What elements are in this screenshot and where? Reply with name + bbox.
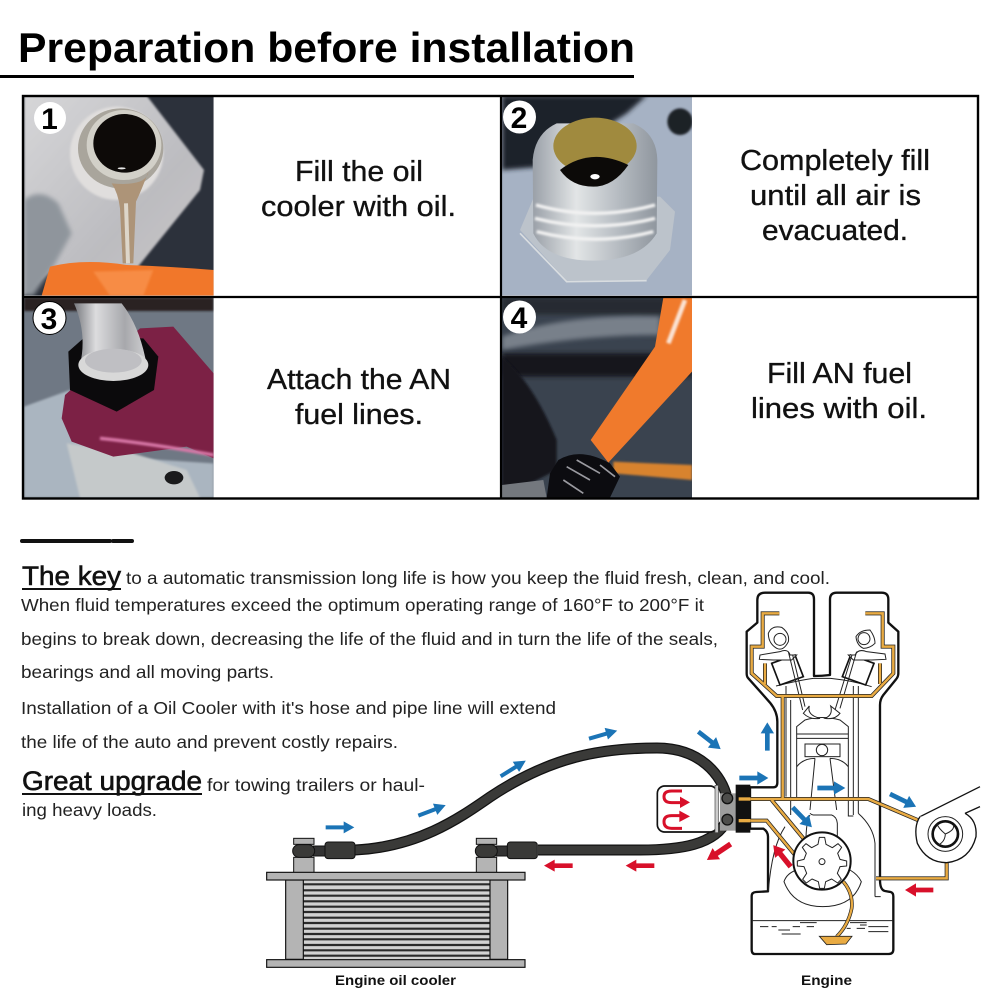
step 2 text: Completely fill	[740, 145, 930, 177]
step 1 text: Fill the oil	[295, 156, 423, 188]
step 4 badge: 4	[511, 302, 528, 335]
oil filter	[657, 785, 718, 833]
text: key sentence: to a automatic transmission long life is how you keep the fluid fresh, clean, and cool.	[126, 568, 830, 588]
text block: fluid temperatures	[21, 595, 718, 682]
step 4 badge	[503, 300, 536, 335]
step 4 text: lines with oil.	[751, 393, 927, 425]
turbocharger	[916, 787, 980, 863]
caption: engine: Engine	[801, 972, 852, 988]
step 2 text: until all air is	[750, 180, 921, 212]
step 3 text: fuel lines.	[295, 399, 423, 431]
step 2 badge: 2	[511, 102, 527, 135]
step 3 badge	[33, 302, 66, 336]
caption: engine oil cooler: Engine oil cooler	[335, 972, 457, 988]
oil pan and pickup	[753, 882, 893, 945]
crankcase details	[768, 813, 881, 897]
step 1 text	[261, 156, 456, 223]
panel: preparation steps table	[23, 96, 978, 498]
photo 2: fitting filled with oil	[502, 96, 693, 296]
text block: installation benefit: the life of the auto and prevent costly repairs.	[21, 732, 398, 752]
photo 4: filling AN line with funnel	[502, 298, 692, 498]
filter adapter	[720, 785, 750, 833]
oil hoses	[355, 748, 727, 850]
step 1 badge	[34, 102, 66, 136]
text block: installation benefit	[21, 698, 556, 752]
cylinder and piston	[776, 678, 872, 816]
flow arrows around engine	[694, 722, 933, 897]
photo 3: AN fitting with wrench	[24, 298, 214, 498]
text block: fluid temperatures: When fluid temperatures exceed the optimum operating range of 160°F to 200°F it	[21, 595, 704, 615]
step 2 badge	[503, 100, 536, 135]
step 1 text: cooler with oil.	[261, 191, 456, 223]
valvetrain	[759, 627, 886, 719]
photo 1: pouring oil from bottle	[24, 96, 214, 296]
step 2 text: evacuated.	[762, 215, 908, 247]
step 3 text: Attach the AN	[267, 364, 451, 396]
step 1 badge: 1	[41, 103, 58, 136]
step 4 text: Fill AN fuel	[767, 358, 912, 390]
step 2 text	[740, 145, 930, 247]
flow arrows along hose	[326, 725, 654, 872]
engine oil cooler	[267, 838, 537, 967]
engine block outline	[747, 593, 898, 954]
text block: fluid temperatures: bearings and all moving parts.	[21, 662, 274, 682]
engine diagram	[657, 593, 980, 954]
step 3 badge: 3	[41, 303, 57, 336]
heading: the key: The key	[22, 561, 122, 591]
step 3 text	[267, 364, 451, 431]
text: towing: for towing trailers or haul-	[207, 775, 425, 795]
text: towing: ing heavy loads.	[22, 800, 157, 820]
text block: fluid temperatures: begins to break down, decreasing the life of the fluid and in turn the life of the seals,	[21, 629, 718, 649]
step 4 text	[751, 358, 927, 425]
oil galleries (orange lines)	[737, 613, 947, 878]
cooler fittings	[293, 838, 537, 873]
text block: installation benefit: Installation of a Oil Cooler with it's hose and pipe line will extend	[21, 698, 556, 718]
heading: great upgrade: Great upgrade	[22, 766, 202, 796]
title: Preparation before installation	[18, 24, 635, 71]
text: towing	[22, 775, 425, 820]
oil pump gear and crescent	[784, 832, 861, 907]
